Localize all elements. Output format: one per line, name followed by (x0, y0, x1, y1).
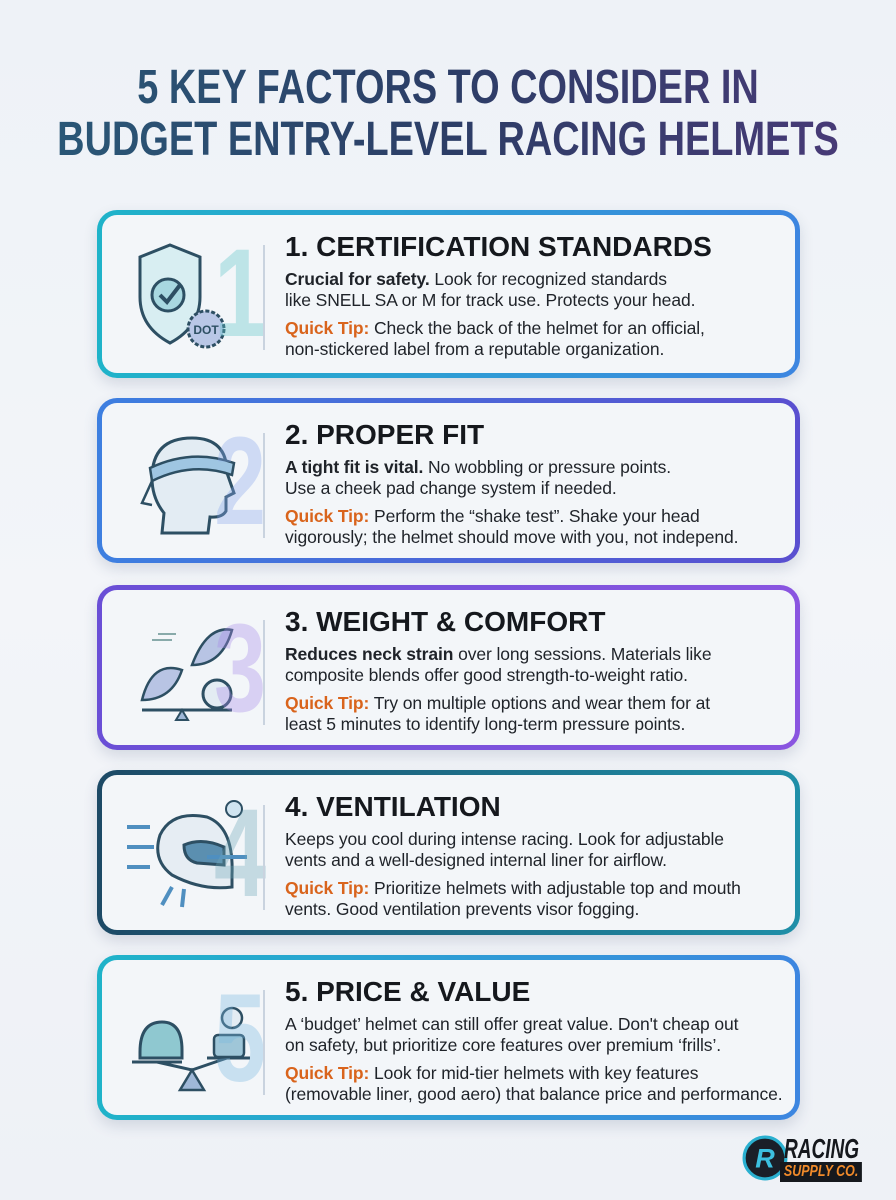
text: Quick Tip: Prioritize helmets with adjustable top and mouth (285, 878, 741, 898)
panel: proper fit (97, 398, 800, 563)
text: 3. WEIGHT & COMFORT (285, 606, 605, 637)
icon: shield with DOT badge (138, 243, 226, 348)
text: (removable liner, good aero) that balance price and performance. (285, 1084, 783, 1104)
number 5: 5 (214, 969, 266, 1108)
panel: price & value (97, 955, 800, 1120)
logo: racing supply co (742, 1133, 862, 1182)
icon: helmet with airflow arrows (127, 800, 247, 908)
text: least 5 minutes to identify long-term pressure points. (285, 714, 685, 734)
text: Quick Tip: Perform the “shake test”. Shake your head (285, 506, 700, 526)
text: Keeps you cool during intense racing. Look for adjustable (285, 829, 724, 849)
text: Quick Tip: Look for mid-tier helmets with key features (285, 1063, 698, 1083)
icon: helmet vs coins scale (132, 1006, 250, 1092)
text: composite blends offer good strength-to-weight ratio. (285, 665, 688, 685)
title: BUDGET ENTRY-LEVEL RACING HELMETS (57, 113, 839, 166)
text: 1. CERTIFICATION STANDARDS (285, 231, 712, 262)
number 3: 3 (214, 599, 266, 738)
text: vents and a well-designed internal liner for airflow. (285, 850, 667, 870)
title: 5 KEY FACTORS TO CONSIDER IN (137, 61, 759, 114)
logo: racing supply co: SUPPLY CO. (784, 1163, 858, 1180)
text: Crucial for safety. Look for recognized standards (285, 269, 667, 289)
text: Use a cheek pad change system if needed. (285, 478, 617, 498)
title (15, 62, 881, 166)
text (285, 791, 741, 919)
icon: head with measuring tape (140, 436, 236, 534)
text (285, 419, 738, 547)
panel: weight & comfort (97, 585, 800, 750)
text: Reduces neck strain over long sessions. Materials like (285, 644, 711, 664)
text (285, 231, 712, 359)
text (285, 976, 783, 1104)
text: A tight fit is vital. No wobbling or pressure points. (285, 457, 671, 477)
number 2: 2 (214, 412, 266, 551)
logo: racing supply co: R (755, 1142, 775, 1173)
text: non-stickered label from a reputable organization. (285, 339, 664, 359)
logo: racing supply co: RACING (784, 1133, 859, 1164)
text: A ‘budget’ helmet can still offer great value. Don't cheap out (285, 1014, 738, 1034)
text (285, 606, 711, 734)
text: 2. PROPER FIT (285, 419, 484, 450)
text: on safety, but prioritize core features over premium ‘frills’. (285, 1035, 721, 1055)
text: like SNELL SA or M for track use. Protects your head. (285, 290, 695, 310)
number 1: 1 (214, 224, 266, 363)
icon: shield with DOT badge: DOT (193, 323, 219, 337)
text: 5. PRICE & VALUE (285, 976, 530, 1007)
icon: feathers and scale (140, 628, 234, 721)
text: Quick Tip: Try on multiple options and wear them for at (285, 693, 710, 713)
panel: certification standards (97, 210, 800, 378)
panel: ventilation (97, 770, 800, 935)
text: Quick Tip: Check the back of the helmet for an official, (285, 318, 705, 338)
text: vigorously; the helmet should move with you, not independ. (285, 527, 738, 547)
text: 4. VENTILATION (285, 791, 501, 822)
number 4: 4 (214, 784, 266, 923)
text: vents. Good ventilation prevents visor fogging. (285, 899, 639, 919)
